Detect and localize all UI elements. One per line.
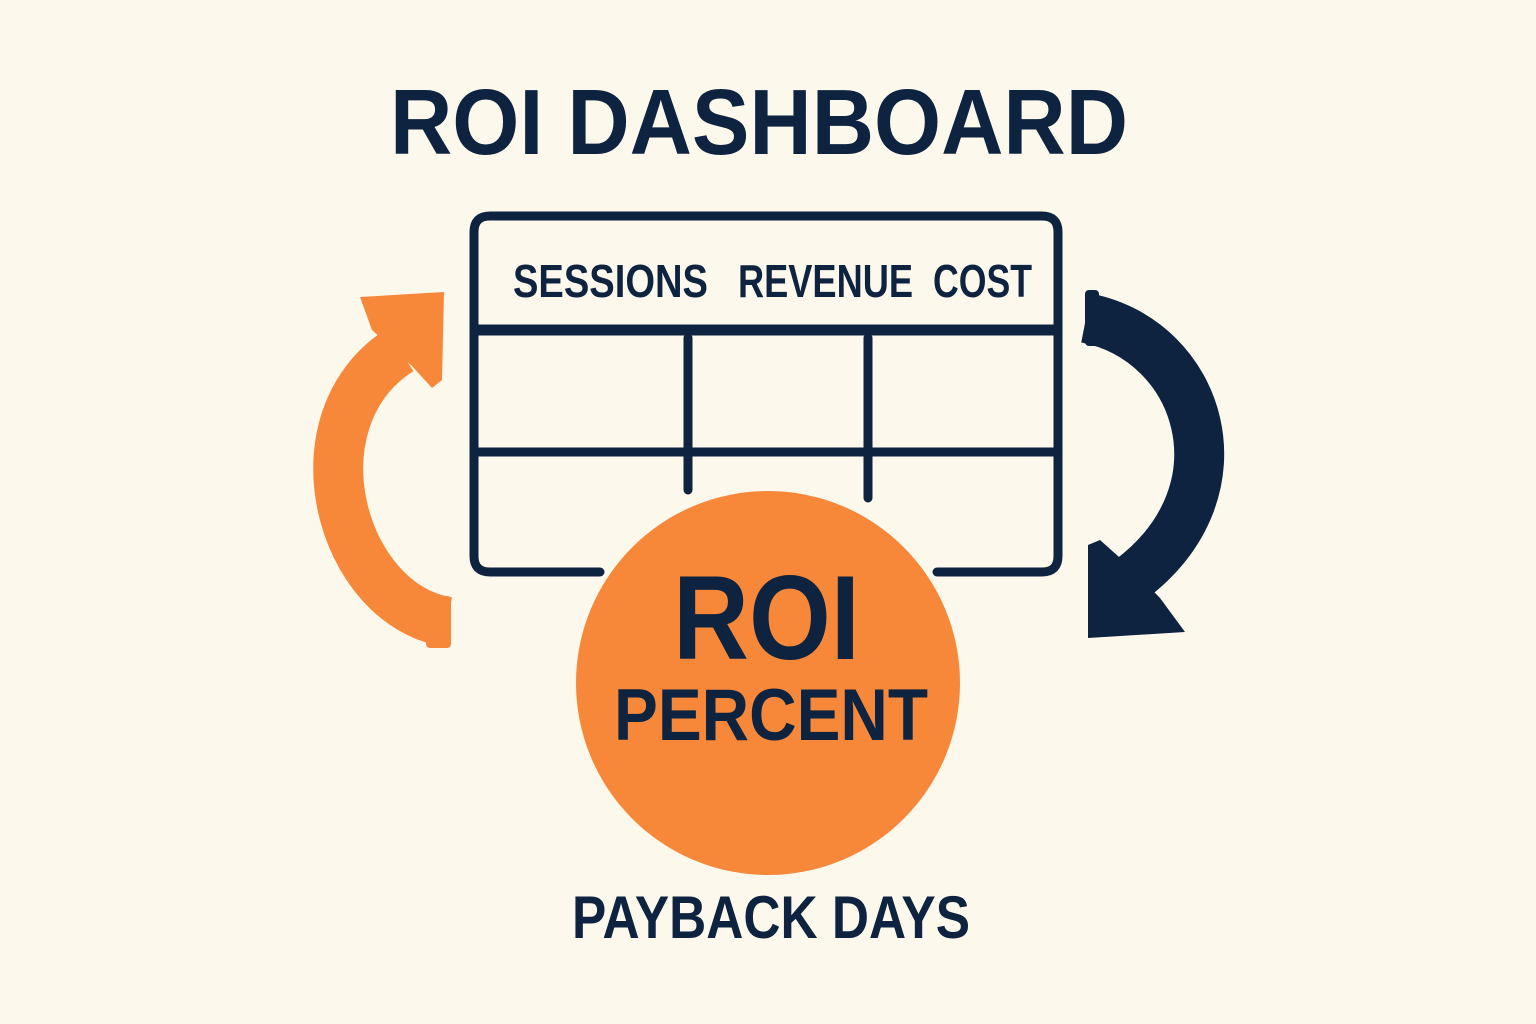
header labels: REVENUE [738, 255, 913, 307]
ROI percent circle: PERCENT [614, 675, 928, 756]
ROI percent circle [576, 491, 960, 875]
header labels: SESSIONS [513, 255, 708, 307]
header labels [513, 255, 1032, 307]
right navy arrow [1085, 290, 1199, 638]
title: ROI DASHBOARD [390, 70, 1128, 174]
ROI percent circle: ROI [673, 551, 860, 685]
table [474, 216, 1058, 572]
header labels: COST [933, 255, 1032, 307]
left orange arrow [338, 292, 451, 648]
payback days label: PAYBACK DAYS [572, 884, 970, 951]
